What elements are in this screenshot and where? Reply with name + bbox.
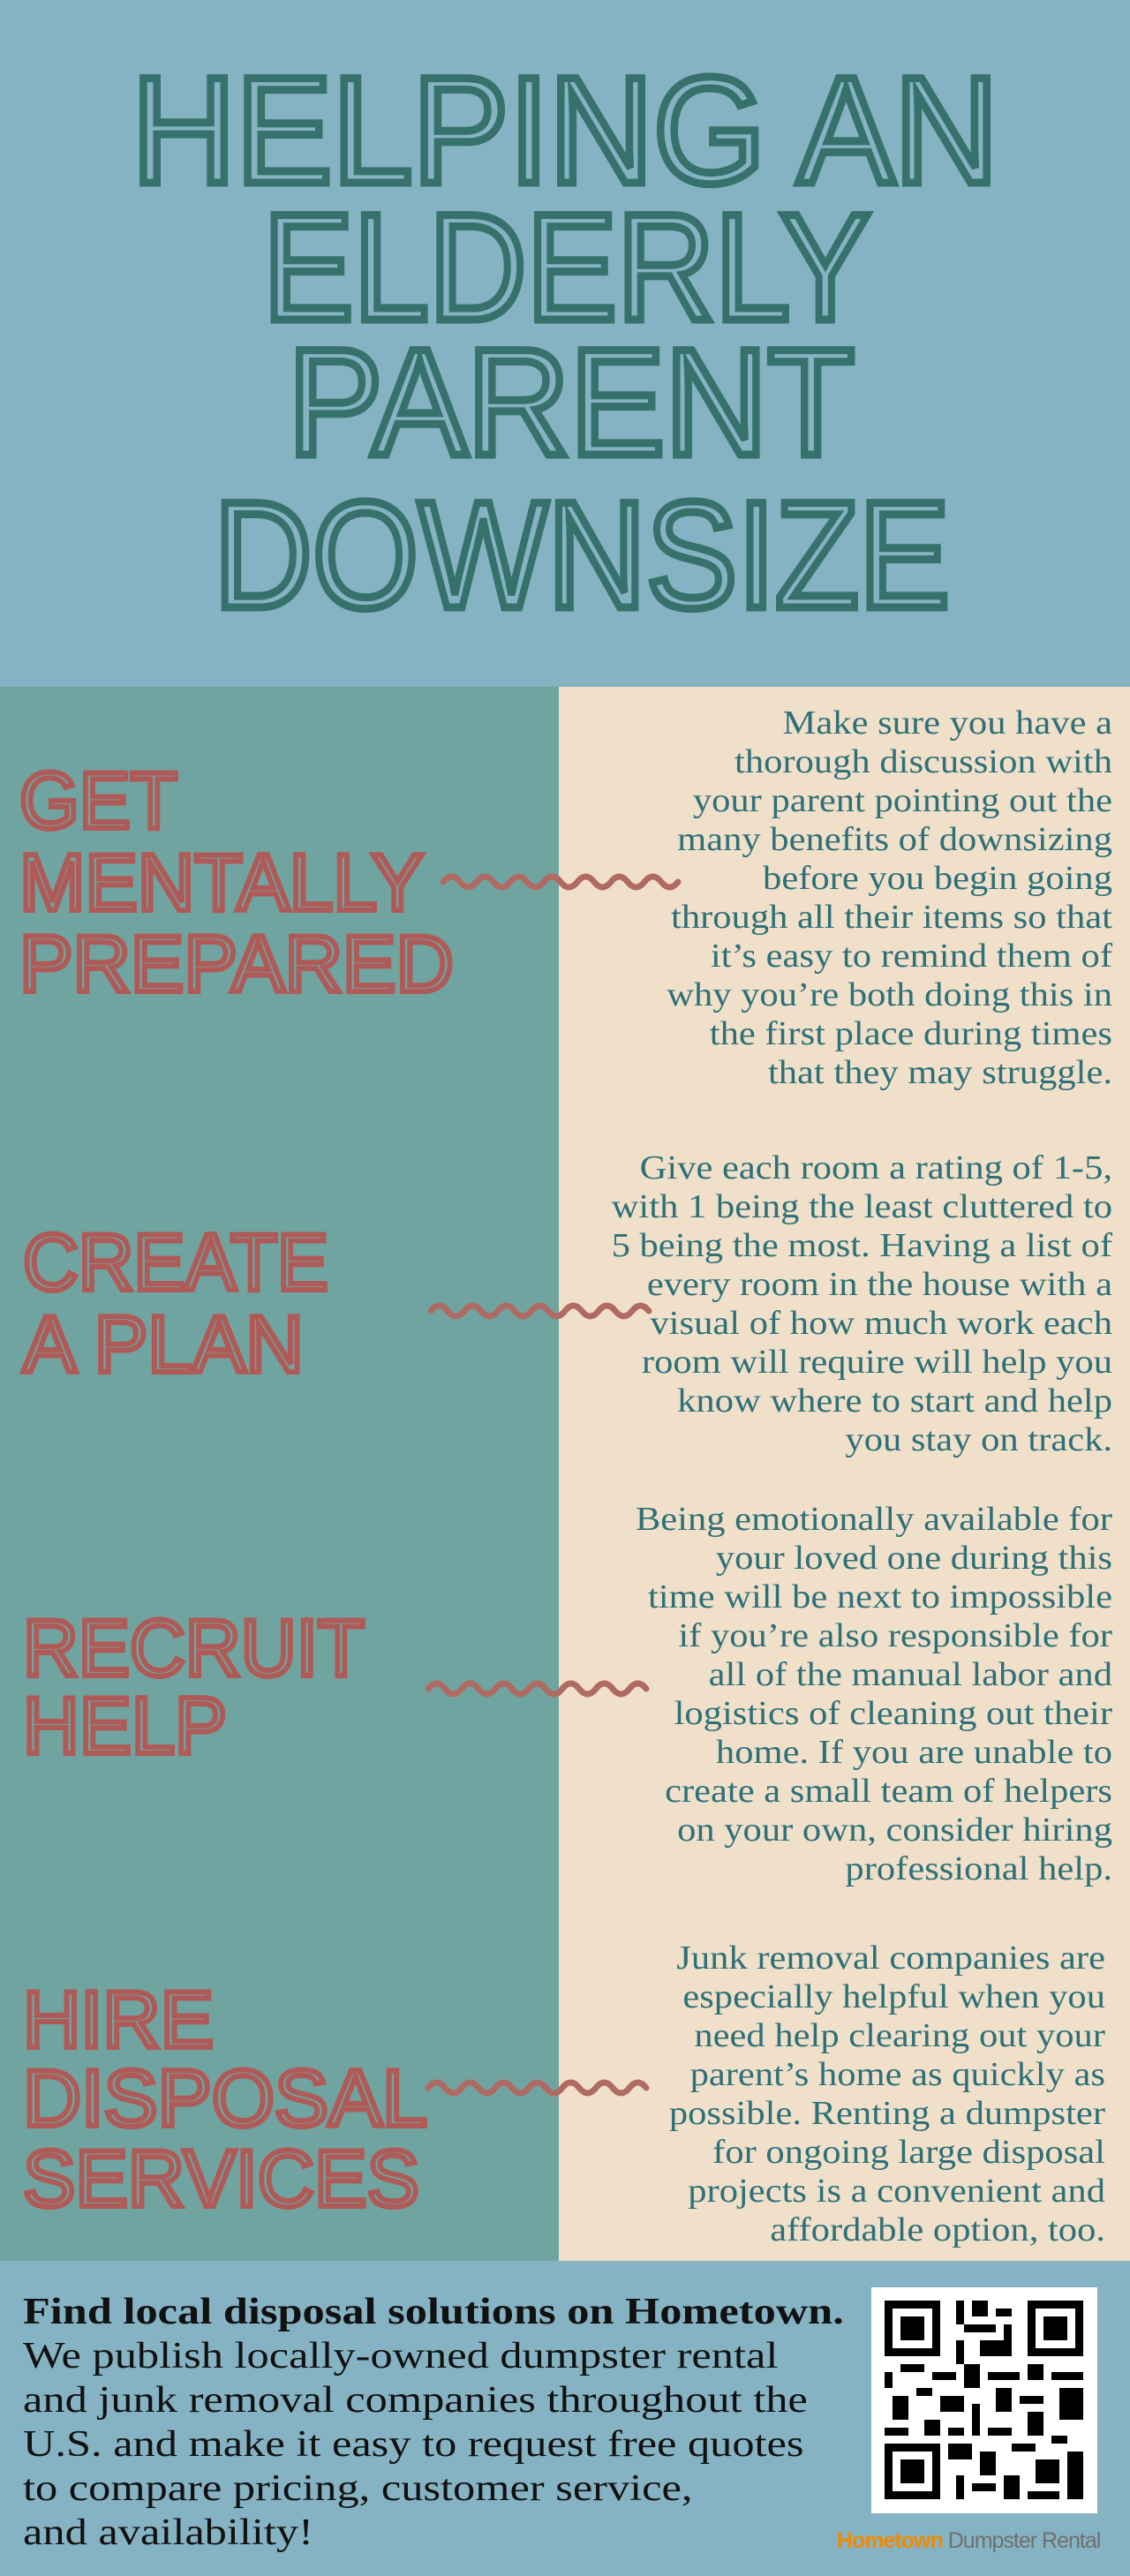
text block: section 3: [636, 1501, 1112, 1887]
heading: hire disposal services: HIRE: [23, 1976, 214, 2065]
text block: section 3: logistics of cleaning out their: [674, 1695, 1112, 1732]
footer text: Find local disposal solutions on Hometown.: [23, 2292, 844, 2332]
squiggle 2: [431, 1306, 649, 1316]
text block: section 3: professional help.: [845, 1850, 1112, 1887]
title band: [0, 0, 1130, 687]
heading: create a plan: [23, 1218, 328, 1390]
heading: hire disposal services: DISPOSAL: [23, 2054, 427, 2143]
text block: section 1: many benefits of downsizing: [677, 821, 1112, 858]
title: PARENT: [288, 318, 855, 487]
text block: section 2: visual of how much work each: [650, 1305, 1112, 1342]
text block: section 4: Junk removal companies are: [676, 1940, 1105, 1977]
footer text: and junk removal companies throughout the: [23, 2380, 808, 2421]
heading: get mentally prepared: GET: [19, 757, 177, 846]
text block: section 3: Being emotionally available for: [636, 1501, 1112, 1538]
text block: section 2: you stay on track.: [845, 1421, 1112, 1458]
text block: section 3: create a small team of helpers: [665, 1773, 1112, 1810]
text block: section 3: if you’re also responsible for: [678, 1617, 1112, 1654]
footer text: We publish locally-owned dumpster rental: [23, 2336, 778, 2376]
text block: section 4: need help clearing out your: [694, 2017, 1105, 2054]
panel: right beige column: [559, 687, 1130, 2261]
text block: section 3: your loved one during this: [716, 1540, 1112, 1577]
heading: hire disposal services: [23, 1976, 427, 2224]
text block: section 3: time will be next to impossible: [648, 1578, 1112, 1616]
text block: section 4: for ongoing large disposal: [712, 2134, 1105, 2171]
heading: get mentally prepared: PREPARED: [19, 920, 454, 1009]
heading: get mentally prepared: [19, 757, 454, 1009]
text block: section 1: the first place during times: [710, 1015, 1112, 1052]
heading: recruit help: [23, 1604, 365, 1771]
text block: section 3: on your own, consider hiring: [677, 1811, 1112, 1849]
text block: section 4: parent’s home as quickly as: [690, 2056, 1105, 2093]
text block: section 4: projects is a convenient and: [688, 2173, 1105, 2210]
text block: section 4: [669, 1940, 1105, 2248]
squiggle 1: [443, 877, 678, 887]
title: HELPING AN: [132, 46, 998, 215]
heading: create a plan: CREATE: [23, 1218, 328, 1307]
text block: section 1: it’s easy to remind them of: [711, 938, 1112, 975]
title: ELDERLY: [263, 183, 870, 352]
text block: section 2: room will require will help you: [642, 1344, 1112, 1381]
text block: section 4: affordable option, too.: [770, 2211, 1105, 2248]
qr code: [871, 2287, 1097, 2513]
squiggle 4: [428, 2083, 646, 2093]
logo: hometown dumpster rental: Hometown Dumpster Rental: [837, 2528, 1100, 2553]
heading: recruit help: RECRUIT: [23, 1604, 365, 1693]
text block: section 3: home. If you are unable to: [716, 1734, 1112, 1771]
footer text: U.S. and make it easy to request free quotes: [23, 2424, 804, 2465]
text block: section 1: why you’re both doing this in: [667, 976, 1112, 1013]
text block: section 1: thorough discussion with: [734, 743, 1112, 780]
panel: left teal column: [0, 687, 559, 2261]
text block: section 2: know where to start and help: [677, 1382, 1112, 1420]
heading: create a plan: A PLAN: [23, 1300, 304, 1390]
text block: section 2: with 1 being the least cluttered to: [612, 1188, 1112, 1225]
text block: section 1: before you begin going: [763, 860, 1112, 897]
text block: section 1: Make sure you have a: [783, 704, 1112, 742]
text block: section 2: every room in the house with a: [647, 1266, 1112, 1303]
text block: section 4: especially helpful when you: [682, 1978, 1105, 2015]
text block: section 1: your parent pointing out the: [693, 782, 1112, 819]
text block: section 2: Give each room a rating of 1-5,: [640, 1149, 1112, 1186]
squiggle 3: [428, 1683, 646, 1694]
text block: section 1: through all their items so that: [671, 899, 1112, 936]
title: DOWNSIZE: [214, 471, 950, 640]
footer band: [0, 2261, 1130, 2576]
title: [132, 46, 998, 640]
text block: section 2: [611, 1149, 1112, 1458]
text block: section 2: 5 being the most. Having a list of: [612, 1227, 1112, 1264]
text block: section 1: [667, 704, 1112, 1091]
heading: get mentally prepared: MENTALLY: [19, 839, 424, 928]
footer text: and availability!: [23, 2512, 313, 2553]
text block: section 4: possible. Renting a dumpster: [669, 2095, 1105, 2132]
footer text: to compare pricing, customer service,: [23, 2468, 693, 2509]
footer text: [23, 2292, 844, 2553]
text block: section 1: that they may struggle.: [768, 1054, 1112, 1091]
heading: recruit help: HELP: [23, 1682, 227, 1771]
heading: hire disposal services: SERVICES: [23, 2135, 419, 2224]
text block: section 3: all of the manual labor and: [709, 1656, 1112, 1693]
